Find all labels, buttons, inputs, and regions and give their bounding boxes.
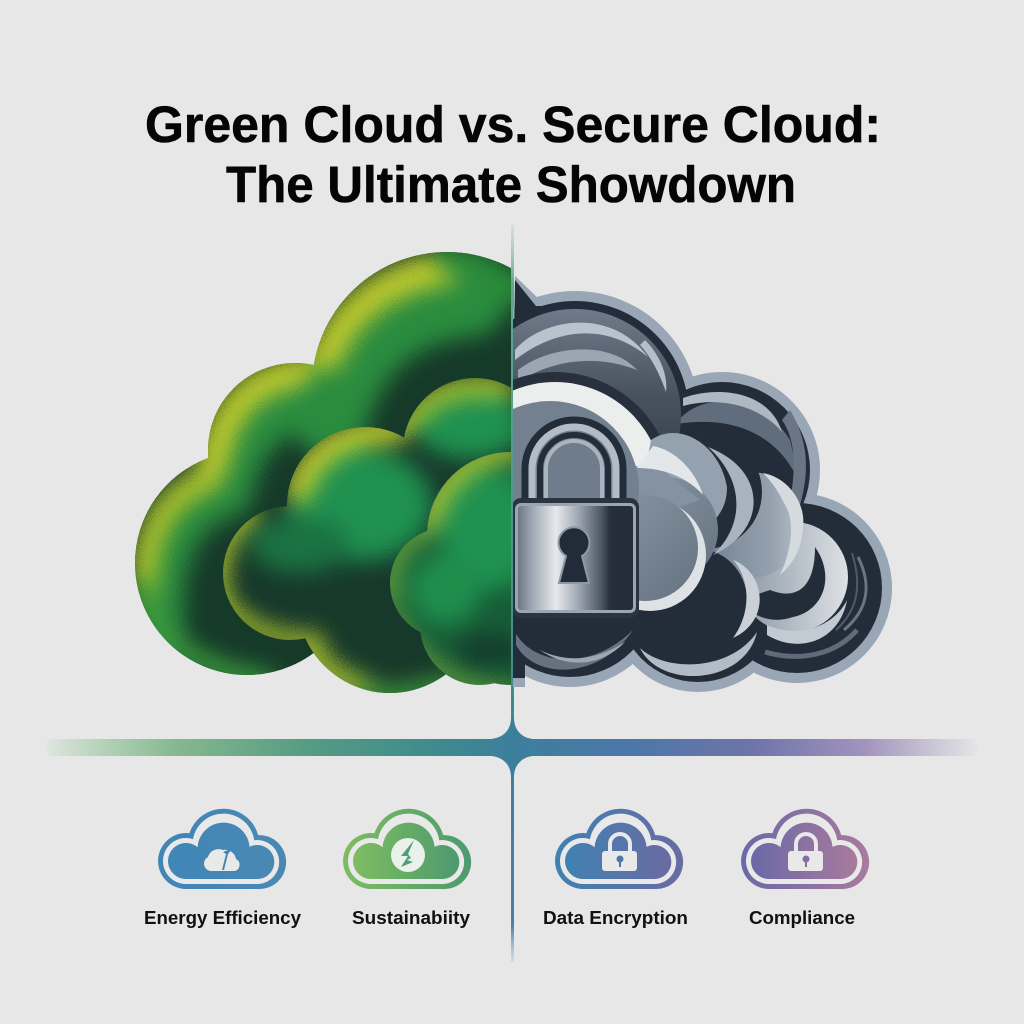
secure cloud: [513, 276, 892, 692]
label: data encryption: Data Encryption: [543, 907, 688, 928]
label: energy efficiency: Energy Efficiency: [144, 907, 302, 928]
far right lobes: [697, 472, 866, 656]
icon: compliance cloud: [741, 809, 869, 889]
top lobe with highlight streaks: [513, 309, 681, 466]
title: [145, 96, 881, 213]
middle green cloud layer: [223, 378, 511, 693]
vertical divider: [511, 225, 514, 962]
padlock shackle: [525, 420, 623, 505]
front green cloud layer: [390, 452, 511, 685]
lock glyph: [788, 834, 823, 871]
label: compliance: Compliance: [749, 907, 855, 928]
keyhole: [558, 527, 590, 583]
central dark crescent lobe: [708, 447, 762, 599]
lower crescents: [516, 560, 760, 676]
label: sustainability: Sustainabiity: [352, 907, 471, 928]
cloud outer rim: [513, 276, 892, 692]
small cloud glyph: [204, 848, 240, 871]
icon: energy efficiency cloud: [158, 809, 286, 889]
cloud dark body: [513, 280, 882, 682]
upper right lobe shading: [677, 392, 806, 505]
title line 1: Green Cloud vs. Secure Cloud:: [145, 96, 881, 153]
icon: data encryption cloud: [555, 809, 683, 889]
icon: sustainability cloud: [343, 809, 471, 889]
leaf bolt glyph: [391, 838, 425, 872]
green cloud: [135, 252, 511, 693]
lock glyph: [602, 834, 637, 871]
middle grey lobe with highlight: [636, 433, 727, 611]
inner grey lobe behind lock: [513, 401, 639, 503]
title line 2: The Ultimate Showdown: [226, 156, 796, 213]
padlock body: [512, 498, 639, 618]
horizontal gradient band with central star: [46, 718, 978, 777]
back green cloud layer: [135, 252, 511, 675]
